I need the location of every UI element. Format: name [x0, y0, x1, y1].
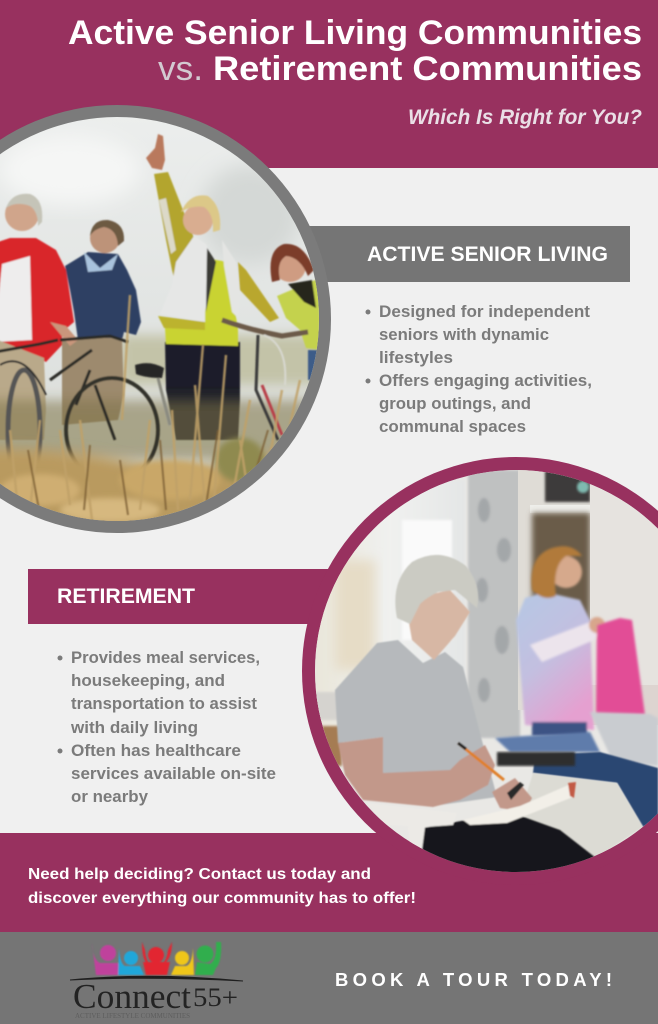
logo: Connect55+: 55+ [193, 983, 238, 1012]
bullet list: retirement: with daily living [70, 719, 198, 737]
heading band: retirement [28, 569, 338, 624]
head [183, 205, 213, 235]
call to action text: discover everything our community has to offer! [28, 890, 416, 907]
bullet list: active senior living [366, 303, 592, 436]
woman on right [277, 278, 320, 350]
bullet list: retirement: or nearby [71, 788, 149, 806]
header band [0, 0, 658, 168]
bullet list: active senior living: lifestyles [379, 349, 453, 367]
bullet list: retirement: Often has healthcare [71, 742, 241, 760]
bike handlebars and frames [0, 336, 128, 440]
photo circle: senior with caregiver [302, 457, 658, 885]
heading band: active senior living: ACTIVE SENIOR LIVING [367, 243, 608, 266]
title: vs. [158, 50, 203, 88]
caregiver [516, 546, 645, 736]
bullet list: active senior living: Designed for independent [379, 303, 591, 321]
call to action text: Need help deciding? Contact us today and [28, 866, 371, 883]
book a tour text: BOOK A TOUR TODAY! [335, 969, 612, 990]
title: Retirement Communities [213, 50, 642, 88]
title: Active Senior Living Communities [68, 14, 642, 52]
curtain [468, 470, 520, 738]
white vest [165, 236, 209, 323]
bullet list: retirement: transportation to assist [71, 695, 257, 713]
call to action band [0, 833, 658, 932]
wardrobe [518, 470, 592, 710]
heading band: retirement: RETIREMENT [57, 585, 195, 608]
woman with raised arm: pants [165, 342, 240, 440]
bullet list: retirement: housekeeping, and [71, 672, 225, 690]
photo circle: active seniors cycling [0, 105, 331, 533]
mid-ground olive shadow [0, 400, 330, 460]
footer band [0, 932, 658, 1024]
raised arm [154, 172, 194, 285]
senior woman [335, 555, 596, 875]
white table [377, 816, 456, 850]
logo: Connect55+ [70, 942, 243, 1020]
logo: Connect55+: Connect [73, 977, 191, 1016]
bullet list: retirement: Provides meal services, [71, 649, 260, 667]
window [315, 480, 465, 740]
shirt [165, 258, 238, 346]
logo: Connect55+: ACTIVE LIFESTYLE COMMUNITIES [75, 1012, 190, 1020]
other arm [238, 262, 279, 322]
bullet list: retirement: services available on-site [71, 765, 276, 783]
bullet list: active senior living: group outings, and [379, 395, 531, 413]
bullet list: active senior living: Offers engaging activities, [379, 372, 592, 390]
man in blue [65, 252, 141, 340]
hand [146, 134, 165, 170]
bullet list: retirement [58, 649, 276, 806]
call to action text [28, 866, 416, 907]
bullet list: active senior living: seniors with dynamic [379, 326, 549, 344]
bed [590, 712, 658, 766]
subtitle: Which Is Right for You? [408, 106, 642, 129]
heading band: active senior living [300, 226, 630, 282]
title [68, 14, 642, 88]
bullet list: active senior living: communal spaces [379, 418, 526, 436]
man in red [0, 238, 74, 362]
foreground grass [0, 441, 270, 521]
